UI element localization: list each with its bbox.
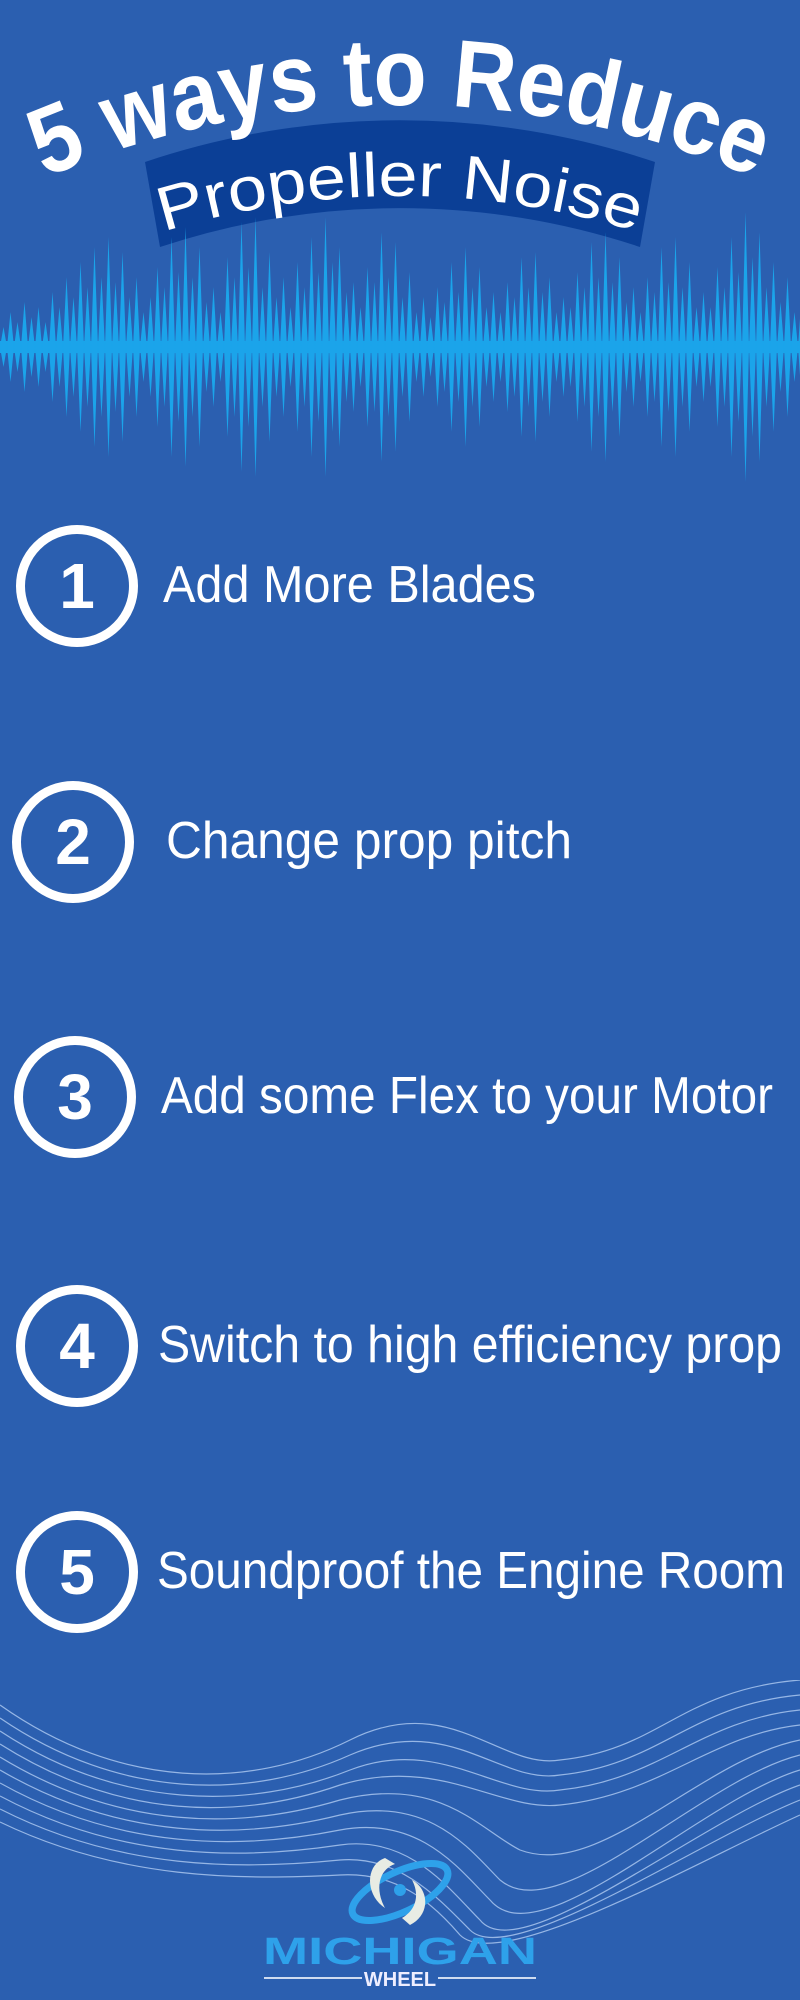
text 2: Change prop pitch (166, 812, 572, 870)
item 2 (12, 781, 572, 903)
number 3 (14, 1036, 136, 1158)
logo text (263, 1933, 537, 1991)
sound waveform (0, 214, 800, 480)
item 3 (14, 1036, 773, 1158)
decorative flowing lines (0, 1680, 800, 1944)
logo: michigan wheel (263, 1858, 537, 1991)
title (26, 40, 765, 247)
text 1: Add More Blades (163, 556, 536, 614)
number 4: 4 (59, 1310, 95, 1382)
banner: propeller noise: Propeller Noise (158, 152, 639, 230)
heading: 5 ways to Reduce: 5 ways to Reduce (26, 40, 765, 172)
number 2 (12, 781, 134, 903)
number 4 (16, 1285, 138, 1407)
number 5 (16, 1511, 138, 1633)
logo text: WHEEL (364, 1969, 436, 1991)
item 1 (16, 525, 536, 647)
icon: propeller emblem (348, 1858, 452, 1925)
number 1: 1 (59, 550, 95, 622)
number 5: 5 (59, 1536, 95, 1608)
item 4 (16, 1285, 782, 1407)
number 2: 2 (55, 806, 91, 878)
item 5 (16, 1511, 785, 1633)
number 3: 3 (57, 1061, 93, 1133)
number 1 (16, 525, 138, 647)
